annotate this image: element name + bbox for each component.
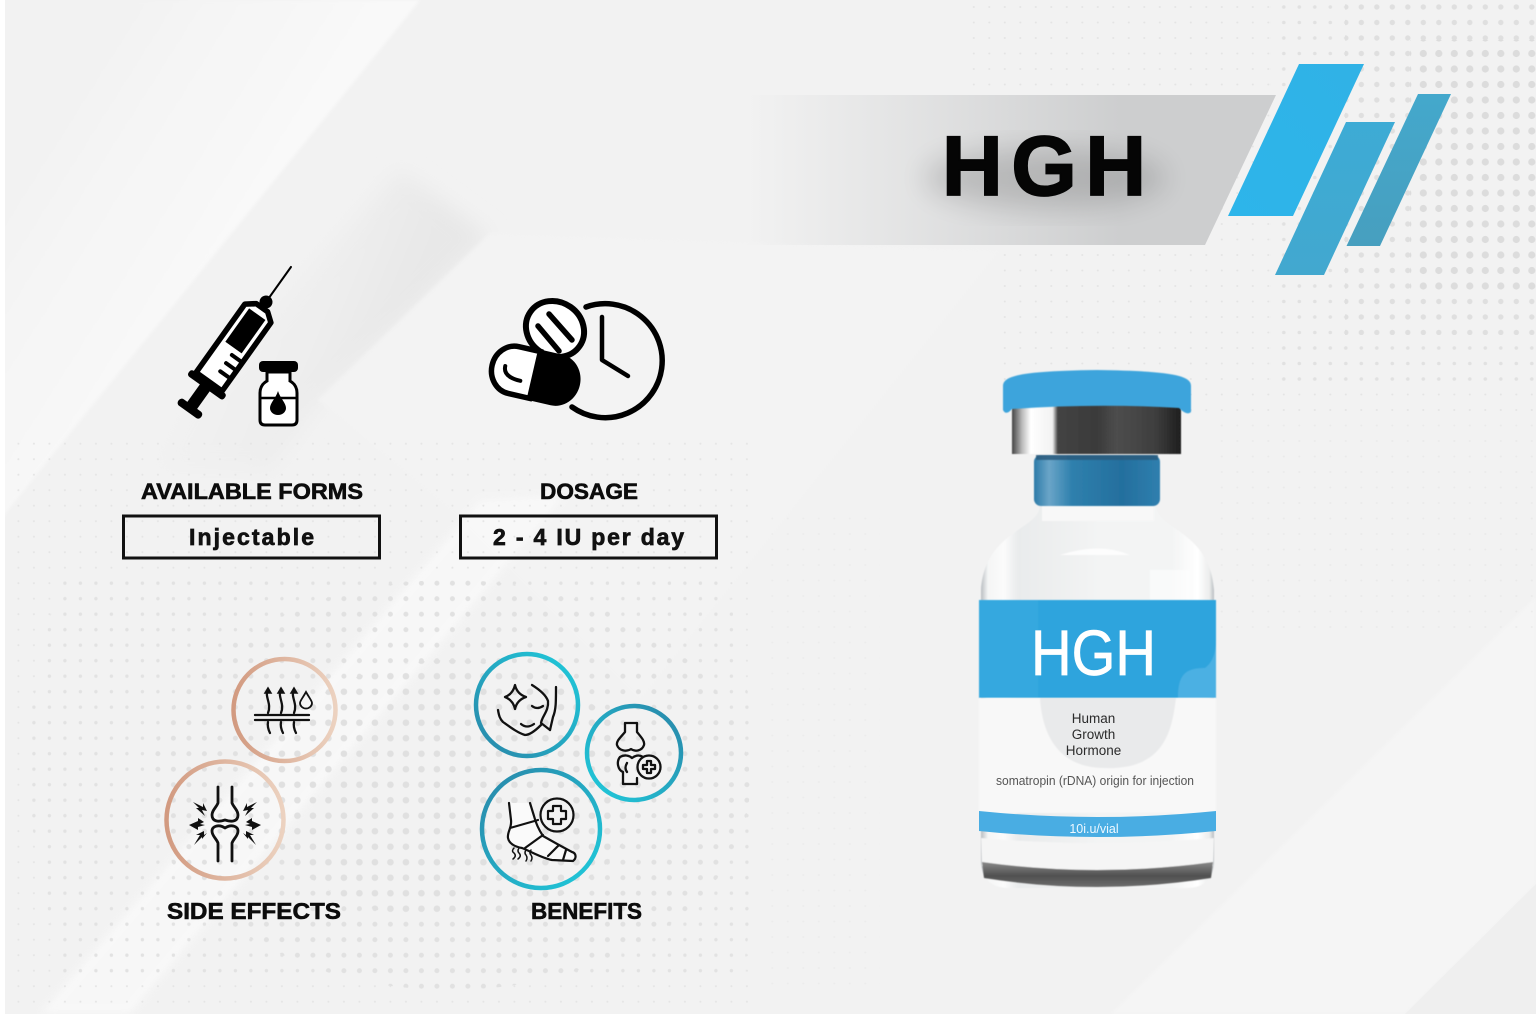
- vial glass body: [981, 503, 1214, 888]
- heading: dosage: DOSAGE: [540, 479, 638, 504]
- value box: injectable: Injectable: [189, 524, 314, 550]
- vial label small text: somatropin (rDNA) origin for injection: [996, 774, 1194, 788]
- icon: syringe: [170, 254, 309, 425]
- vial metal collar: [1012, 404, 1181, 454]
- icon: sweating circle: [234, 659, 336, 761]
- logo: blue slanted bars: [1228, 64, 1451, 275]
- vial label main text: HGH: [1031, 617, 1156, 689]
- vial neck: [1034, 455, 1160, 506]
- icon: knee joint circle: [587, 706, 681, 800]
- title banner: [745, 95, 1276, 245]
- title: HGH: HGH: [942, 119, 1146, 213]
- dot pattern: lower left: [14, 440, 760, 1010]
- vial white label: [979, 698, 1216, 813]
- value box: dosage amount: [460, 516, 716, 558]
- vial dose stripe: [979, 811, 1216, 837]
- vial blue cap: [1003, 370, 1191, 413]
- vial label small text: Growth: [1072, 727, 1115, 742]
- icon: pills and clock: [486, 290, 662, 418]
- heading: available forms: AVAILABLE FORMS: [141, 479, 363, 504]
- vial blue label: [979, 600, 1216, 698]
- vial label small text: Human: [1072, 711, 1115, 726]
- vial illustration: [979, 370, 1216, 888]
- vial dose stripe: 10i.u/vial: [1069, 822, 1119, 836]
- label: side effects: SIDE EFFECTS: [167, 898, 341, 924]
- icon: foot circle: [482, 770, 600, 888]
- value box: dosage amount: 2 - 4 IU per day: [493, 524, 684, 550]
- icon: medicine vial: [259, 361, 298, 425]
- icon: joint pain circle: [166, 762, 284, 878]
- dot pattern: upper right: [770, 0, 1536, 990]
- vial label small text: [996, 711, 1194, 788]
- label: benefits: BENEFITS: [531, 898, 642, 924]
- vial base: [981, 838, 1214, 887]
- value box: injectable: [124, 516, 380, 558]
- vial label small text: Hormone: [1066, 743, 1121, 758]
- icon: skin face circle: [476, 654, 578, 756]
